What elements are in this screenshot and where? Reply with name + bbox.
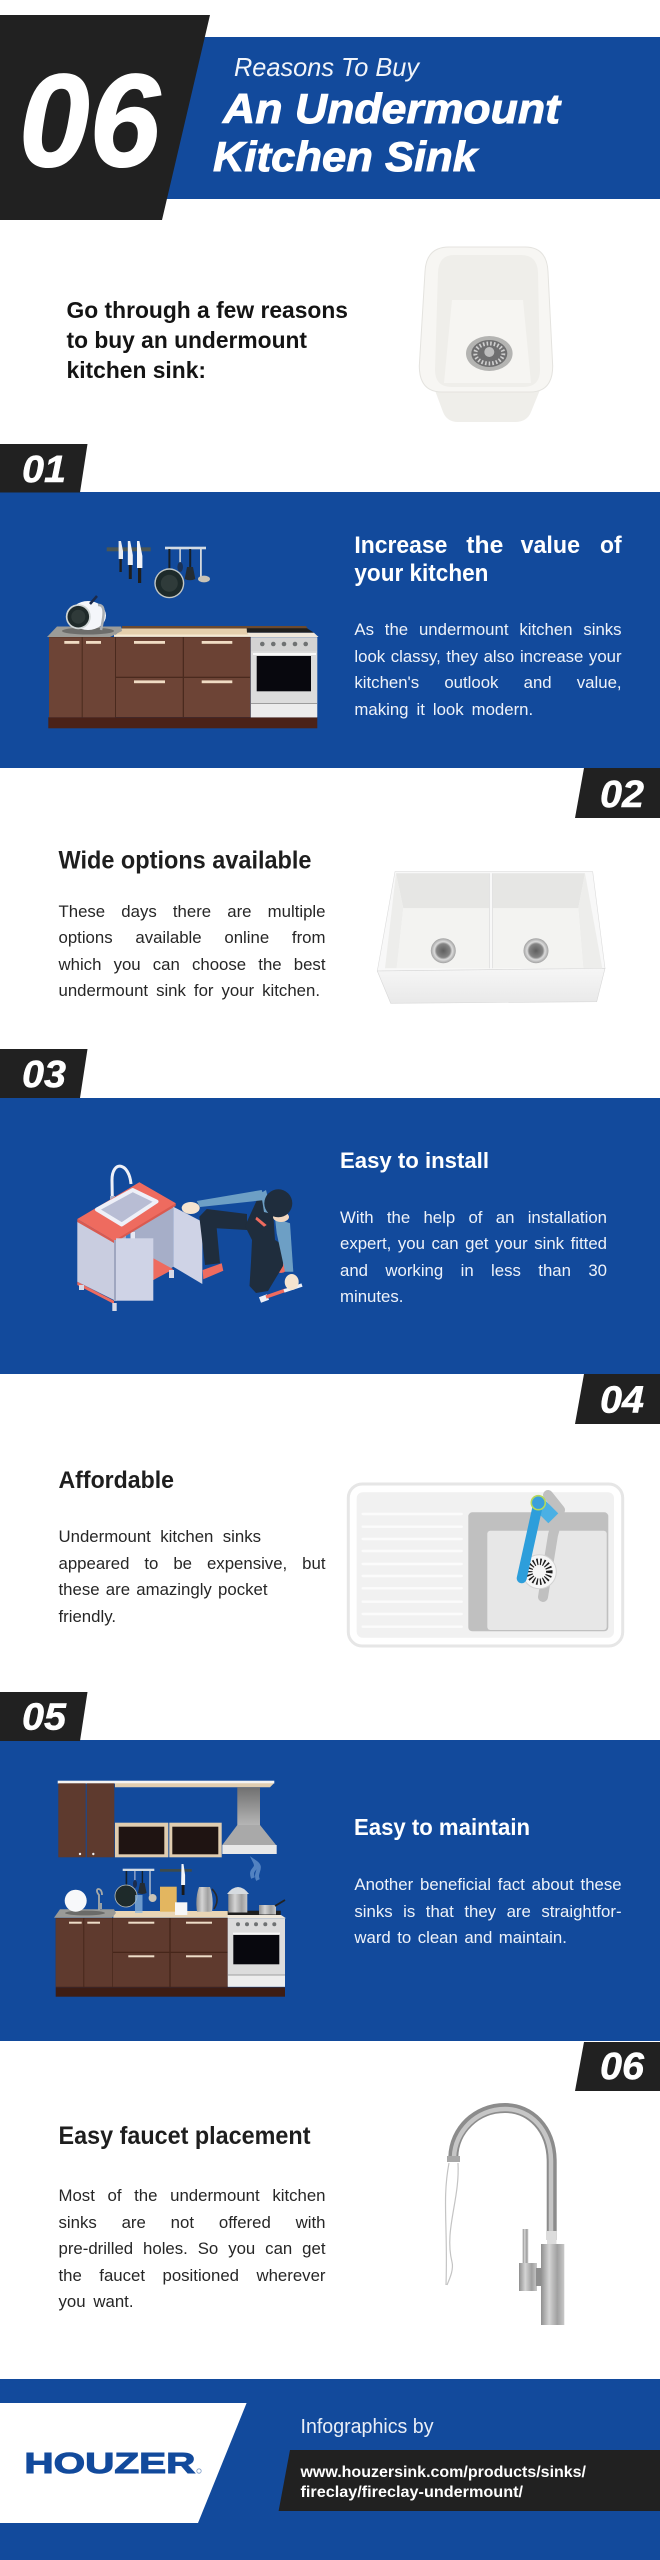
illustration: hanging pans rail [154,547,210,598]
body copy [58,2186,326,2311]
drain [466,336,513,371]
badge 03: 03 [22,1054,66,1096]
body copy: ​minutes. [340,1287,403,1306]
heading [354,532,623,587]
body copy: Another beneficial fact about these [354,1875,622,1894]
illustration: countertop items [65,1862,285,1915]
illustration: plumber [182,1189,302,1300]
heading: value [521,532,580,559]
body copy: which you can choose the best [58,954,326,974]
body copy [354,1875,622,1947]
badge 06: 06 [600,2046,645,2088]
intro text: Go through a few reasons [66,297,348,323]
panel 5: easy to maintain [0,1740,660,2041]
body copy [58,902,326,1000]
illustration: lower kitchen units [54,1909,286,1997]
logo: houzer [24,2448,201,2480]
intro text: kitchen sink: [66,357,206,383]
body copy: ward to clean and maintain. [354,1928,567,1947]
body copy: undermount sink for your kitchen. [58,981,320,1000]
badge 03 [0,1049,88,1098]
badge 05: 05 [22,1696,67,1738]
illustration: sink cabinet [77,1166,202,1311]
panel 2: wide options available [58,847,606,1004]
panel 3: easy to install [0,1098,660,1374]
big number 06: 06 [19,47,162,194]
body copy [58,1527,326,1626]
intro section [66,246,554,422]
logo panel [0,2403,247,2523]
body copy: expert, you can get your sink fitted [340,1234,607,1253]
heading: Wide options available [58,847,312,875]
body copy: kitchen's outlook and value, [354,673,622,692]
badge 01 [0,444,88,492]
icon: stainless faucet with water [445,2108,564,2325]
heading: Easy to install [340,1148,489,1173]
logo: houzer: HOUZER [24,2448,195,2480]
url text [300,2464,587,2501]
body copy: you want. [58,2292,134,2311]
icon: white single-bowl sink [419,247,553,422]
body copy: sinks are not offered with [58,2212,326,2232]
body copy: sinks is that they are straightfor- [354,1902,622,1920]
illustration: knives rack [107,541,151,583]
body copy: appeared to be expensive, but [58,1554,326,1572]
badge 04 [575,1374,660,1424]
title: an undermount: An Undermount [222,85,562,132]
panel 6: easy faucet placement [58,2103,564,2325]
heading: Affordable [58,1467,174,1494]
badge 02 [575,768,660,818]
body copy: pre-drilled holes. So you can get [58,2239,326,2258]
body copy: With the help of an installation [340,1208,607,1227]
intro text [66,297,348,383]
panel 4: affordable [58,1467,624,1648]
url text: www.houzersink.com/products/sinks/ [300,2464,587,2481]
heading: Easy faucet placement [58,2122,311,2150]
pot on sink [66,596,106,630]
badge 05 [0,1692,88,1741]
heading: Easy to maintain [354,1814,530,1840]
icon: double bowl farmhouse sink [377,872,605,1003]
title: kitchen sink: Kitchen Sink [213,133,480,180]
body copy [354,620,622,719]
heading: the [466,532,503,559]
illustration: upper cabinets and hood [58,1781,277,1857]
badge 01: 01 [22,449,66,491]
body copy: ​friendly. [58,1606,116,1626]
panel 1: increase the value [0,492,660,768]
body copy [340,1208,607,1306]
body copy: Most of the undermount kitchen [58,2186,326,2205]
footer [0,2379,660,2560]
credit label: Infographics by [300,2416,434,2438]
body copy: look classy, they also increase your [354,647,622,666]
body copy: These days there are multiple [58,902,326,920]
body copy: As the undermount kitchen sinks [354,620,622,639]
header banner [0,15,660,220]
body copy: making it look modern. [354,700,533,719]
intro text: to buy an undermount [66,327,307,353]
url bar [279,2450,660,2511]
body copy: and working in less than 30 [340,1261,607,1280]
body copy: the faucet positioned wherever [58,2266,326,2284]
badge 02: 02 [600,774,644,816]
heading: your kitchen [354,560,488,587]
badge 04: 04 [600,1380,644,1422]
black number block [0,15,210,220]
heading: of [600,532,623,559]
badge 06 [575,2042,660,2091]
icon: top view sink with faucet [348,1484,623,1646]
body copy: options available online from [58,928,326,947]
heading: Increase [354,532,447,559]
title: reasons to buy: Reasons To Buy [234,52,421,82]
footer background [0,2379,660,2560]
body copy: these are amazingly pocket [58,1580,268,1599]
url text: fireclay/fireclay-undermount/ [300,2484,524,2501]
illustration: kitchen counter [47,596,318,728]
body copy: Undermount kitchen sinks [58,1527,261,1546]
blue title band [150,37,660,199]
